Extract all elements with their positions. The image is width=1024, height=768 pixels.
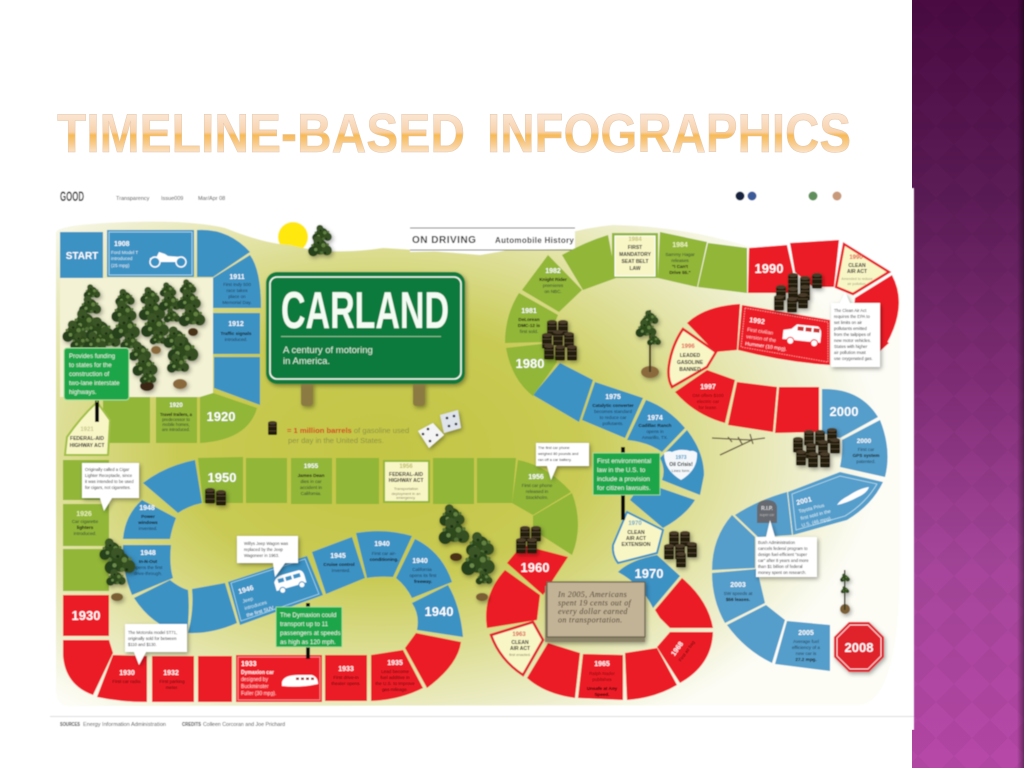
track 1940s curve: 1948 (140, 550, 156, 557)
track 1990s: CLEAN (848, 263, 866, 269)
track 1940s curve: introduces (244, 600, 268, 612)
track 1921-1950 left column: designed by (241, 677, 268, 683)
track 1960s loop: 1963 (512, 632, 526, 638)
branch (712, 434, 765, 455)
track 2000s: First car (858, 447, 875, 452)
track 2000s (712, 389, 888, 671)
track 1990s: 1997 (700, 384, 716, 391)
track 1970s: Oil Crisis! (669, 462, 693, 468)
track 1960s loop: 1968 (670, 641, 685, 658)
callout: highway funding: two-lane interstate (69, 380, 120, 387)
track 1921-1950 left column: First parking (159, 679, 185, 684)
track 1940s curve: In-N-Out (139, 559, 158, 564)
track 1908-1920: race takes (226, 288, 248, 293)
tombstone rip: super car (760, 513, 775, 517)
callout: bush administration: than $1 billion of federal (758, 564, 803, 569)
track 1950s row: emergency. (396, 496, 416, 500)
callout: motorola: The Motorola model 5T71, (128, 630, 177, 635)
track 1940s curve: invented. (139, 526, 157, 531)
track 1940s curve: Cruise control (323, 562, 355, 567)
track 1980s: 1982 (545, 268, 561, 275)
track 1970s: pollutants. (603, 421, 623, 426)
callout: car phone (536, 443, 589, 480)
track 1990s: electric car (697, 399, 720, 404)
track 2000s: 2003 (730, 582, 746, 589)
track 1940s curve: drive-through. (134, 571, 162, 576)
track 1960s loop: 1970 (635, 566, 663, 581)
callout: bush administration: money spent on research. (758, 570, 806, 575)
barrels stat: = 1 million barrels of gasoline used (287, 426, 409, 435)
track 1960s loop (486, 512, 713, 700)
track 1970s: 1974 (647, 415, 663, 422)
track 1990s: Amended to reduce (841, 277, 873, 281)
track 1970s: 1973 (675, 455, 687, 461)
track 1990s: for lease. (699, 405, 717, 410)
on driving heading: Automobile History (495, 236, 574, 245)
track 1990s: 1990 (755, 261, 783, 276)
track 1940s curve: opens its first (409, 573, 437, 578)
track 1990s: 1990 (849, 255, 863, 261)
infographic poster (50, 188, 914, 730)
sun (278, 222, 308, 252)
track 2000s: 2000 (830, 404, 858, 419)
track 1960s loop: EXTENSION (622, 542, 651, 548)
track 1970s: becomes standard (594, 409, 632, 414)
callout: willys jeep: Willys Jeep Wagon was (244, 541, 288, 546)
track 1990s: GM offers $100 (692, 393, 724, 398)
track 1921-1950 left column: Car cigarette (72, 519, 99, 524)
book: household spending (545, 582, 645, 642)
track 2000s: SW speeds at (724, 591, 753, 596)
track 1980s: 1984 (628, 237, 642, 243)
track 1950s row: deployment in an (392, 492, 420, 496)
callout: highway funding: construction of (69, 371, 110, 378)
callout: first environmental law (593, 447, 660, 520)
masthead: GOOD (60, 188, 84, 204)
track 1950s row: dies in car (301, 479, 322, 484)
footer credits: CREDITS (182, 722, 202, 728)
track 1980s: MANDATORY (619, 252, 652, 258)
track 1960s loop: publishes (592, 677, 612, 682)
track 1940s curve: 1940 (425, 604, 453, 619)
1921 federal-aid sign: 1921 (80, 427, 94, 433)
track 1980s: SEAT BELT (621, 259, 649, 265)
track 2000s: first sold in the (800, 509, 832, 522)
track 1980s: FIRST (628, 245, 642, 251)
callout: clean air act: requires the EPA to (834, 314, 870, 319)
track 1970s: Lines form. (672, 469, 690, 473)
track 1940s curve: conditioning. (370, 557, 398, 562)
track 1921-1950 left column: 1926 (76, 511, 92, 518)
callout: clean air act: The Clean Air Act (834, 308, 867, 313)
track 1980s: 1984 (672, 242, 688, 249)
forest trees (62, 279, 205, 391)
track 1921-1950 left column: fuel additive in (380, 675, 410, 680)
track 1970s: 1975 (605, 394, 621, 401)
track 1950s row: HIGHWAY ACT (389, 478, 423, 484)
footer credits: Colleen Corcoran and Joe Prichard (203, 722, 285, 728)
dice (418, 410, 461, 448)
callout: clean air act (831, 292, 880, 367)
footer credits (50, 716, 914, 728)
carland road sign: in America. (283, 356, 330, 367)
track 1908-1920: 1920 (169, 403, 183, 409)
callout: willys jeep: Wagoneer in 1963. (244, 553, 279, 558)
track 2000s: $56 leases. (726, 597, 750, 602)
track 1940s curve: opens the first (134, 565, 163, 570)
track 1980s: "I Can't (672, 264, 688, 269)
callout: first environmental law: law in the U.S. to (597, 467, 646, 474)
track 1980s: releases (671, 258, 689, 263)
track 1940s curve: 1940 (374, 541, 390, 548)
track 1950s row: Stockholm. (526, 495, 548, 500)
track 1921-1950 left column: lighters (77, 525, 94, 530)
callout: clean air act: set limits on air (834, 320, 863, 325)
callout: dymaxion: The Dymaxion could (280, 612, 337, 619)
callout: bush administration: cancels federal program to (758, 546, 808, 551)
track 2000s: U.S. (46 mpg). (801, 516, 833, 529)
callout: cigarette lighter (82, 463, 139, 511)
track 2000s: 2001 (796, 496, 813, 507)
track 1908-1920: First Indy 500 (223, 282, 251, 287)
track 2000s: 2005 (798, 630, 814, 637)
track 1921-1950 left column: 1930 (119, 670, 135, 677)
track 1990s: Hummer (10 mpg). (745, 341, 787, 353)
callout: dymaxion: passengers at speeds (280, 630, 341, 637)
masthead (60, 188, 842, 204)
callout: bush administration: car" after 8 years and more (758, 558, 809, 563)
track 1921-1950 left column: introduced. (74, 531, 96, 536)
track 1908-1920: are introduced. (162, 427, 190, 432)
track 1908-1920: introduced. (225, 337, 247, 342)
track 1960s loop: Speed. (594, 692, 610, 697)
track 1960s loop: Ralph Nader (589, 671, 615, 676)
track 1990s: version of the (746, 334, 776, 344)
track 2000s: new car is (796, 651, 817, 656)
track 1908-1920: 1912 (228, 321, 244, 328)
callout: clean air act: air pollution must (834, 350, 866, 355)
track 1960s loop: First air bag (678, 639, 696, 663)
track 1940s curve: 1945 (330, 553, 346, 560)
callout: car phone: weighed 80 pounds and (538, 452, 578, 456)
track 1940s curve: invented. (332, 568, 350, 573)
track 1921-1950 left column: 1935 (387, 660, 403, 667)
callout: highway funding: highways. (69, 389, 97, 396)
title: TIMELINE-BASED (57, 102, 465, 164)
track 1980s: 1980 (516, 356, 544, 371)
track 1950s row: 1956 (399, 464, 413, 470)
callout: bush administration (756, 520, 817, 577)
track 1908-1920: Ford Model T (111, 250, 138, 255)
board landscape (56, 222, 900, 706)
track 1921-1950 left column: Dymaxion car (241, 670, 274, 676)
callout: first environmental law: First environmental (597, 458, 651, 465)
track 2000s: GPS system (853, 453, 879, 458)
track 1940s curve: Power (141, 514, 155, 519)
track 1990s: AIR ACT (847, 269, 867, 275)
track 1921-1950 left column: theater opens. (331, 681, 361, 686)
forest clearing (60, 278, 213, 397)
track 1980s (505, 232, 747, 396)
track 1970s: opens in (646, 429, 664, 434)
track 1908-1920: Traffic signals (221, 331, 252, 336)
track 1940s curve: 1940 (412, 558, 428, 565)
tombstone rip (757, 500, 777, 523)
track 2000s: patented. (856, 459, 876, 464)
track 1908-1920 (60, 230, 261, 443)
callout: dymaxion (276, 603, 342, 659)
track 1990s: First civilian (747, 327, 774, 337)
stop sign 2008 (834, 622, 884, 672)
track 2000s: Toyota Prius (798, 503, 826, 515)
track 1980s: on NBC. (544, 289, 562, 294)
track 1950s row: California. (301, 491, 321, 496)
callout: cigarette lighter: for cigars, not cigarettes. (85, 485, 131, 490)
purple side panel (912, 0, 1024, 768)
track 1980s: DeLorean (518, 317, 540, 322)
track 2000s: efficiency of a (792, 645, 820, 650)
masthead: Transparency (116, 196, 150, 202)
callout: highway funding: to states for the (69, 362, 112, 369)
callout: clean air act: new motor vehicles. (834, 338, 871, 343)
track 1908-1920: Memorial Day. (222, 300, 252, 305)
callout: motorola: $110 and $130. (128, 642, 157, 647)
track 1921-1950 left column: Lead become (381, 669, 409, 674)
track 1921-1950 left column: 1932 (163, 670, 179, 677)
book: household spending: In 2005, Americans (557, 590, 627, 599)
callout: cigarette lighter: Lighter Receptacle, since (85, 473, 133, 478)
callout: willys jeep: replaced by the Jeep (244, 547, 284, 552)
track 1908-1920: predecessor to (162, 417, 191, 422)
callout: motorola: originally sold for between (128, 636, 177, 641)
callout: motorola (125, 624, 187, 665)
track 1950s row: accident in (300, 485, 322, 490)
tombstone rip: R.I.P. (761, 506, 774, 512)
title (57, 102, 851, 164)
track 1990s: BANNED (679, 367, 701, 373)
callout: highway funding: Provides funding (69, 353, 116, 360)
track 1940s curve (123, 460, 463, 637)
track 1908-1920: 1920 (207, 409, 235, 424)
track 1980s: LAW (629, 266, 641, 272)
track 1980s: premieres (543, 283, 564, 288)
track 1921-1950 left column: 1930 (72, 608, 100, 623)
track 1980s: DMC-12 is (518, 323, 541, 328)
book: household spending: on transportation. (558, 616, 623, 624)
track 1940s curve: 1948 (139, 505, 155, 512)
track 1908-1920: 1908 (114, 241, 130, 248)
barrel stacks (205, 273, 840, 568)
track 1990s: air pollution. (847, 282, 867, 286)
track 1950s row: 1955 (304, 463, 319, 470)
track 1950s row: James Dean (298, 473, 325, 478)
carland road sign: A century of motoring (283, 345, 373, 356)
callout: bush administration: Bush Administration (758, 540, 796, 545)
carland road sign: CARLAND (281, 282, 449, 340)
track 1960s loop: CLEAN (511, 640, 529, 646)
track 1950s row: released in (526, 489, 549, 494)
track 1960s loop: AIR ACT (626, 536, 646, 542)
track 1908-1920: Travel trailers, a (160, 412, 193, 417)
track 1921-1950 left column: 1933 (338, 666, 354, 673)
callout: first environmental law: include a provision (597, 476, 650, 483)
carland road sign (266, 272, 465, 406)
track 1908-1920: 1911 (229, 274, 245, 281)
callout: clean air act: use oxygenated gas. (834, 356, 873, 361)
track 1921-1950 left column: Fuller (30 mpg). (241, 691, 276, 697)
track 1921-1950 left column: gas mileage. (382, 687, 408, 692)
small trees (99, 225, 850, 614)
callout: clean air act: pollutants emitted (834, 326, 867, 331)
track 1950s row: 1956 (528, 474, 544, 481)
barrels stat (268, 421, 409, 445)
track 1980s: Sammy Hagar (665, 252, 695, 257)
callout: cigarette lighter: Originally called a Cigar (85, 467, 130, 472)
callout: highway funding (64, 348, 129, 423)
track 1908-1920: place on (228, 294, 246, 299)
track 1970s: to reduce car (600, 415, 627, 420)
track 1950s row: 1950 (208, 470, 236, 485)
track 1921-1950 left column: First car radio. (112, 679, 142, 684)
footer credits: Energy Information Administration (83, 722, 166, 728)
callout: cigarette lighter: it was intended to be used (85, 479, 134, 484)
track 1960s loop: first enacted. (509, 653, 531, 657)
track 1908-1920: introduced (111, 256, 133, 261)
track 1921-1950 left column: 1933 (241, 661, 257, 668)
barrels stat: per day in the United States. (288, 436, 384, 445)
callout: car phone: The first car phone (538, 446, 570, 450)
track 1921-1950 left column: First drive-in (333, 675, 359, 680)
1921 federal-aid sign (65, 402, 110, 455)
track 1940s curve: First car air- (372, 551, 397, 556)
book: household spending: spent 19 cents out of (558, 598, 633, 608)
callout: dymaxion: transport up to 11 (280, 621, 329, 628)
track 1980s: first sold. (520, 329, 538, 334)
track 1921-1950 left column: Buckminster (241, 684, 269, 690)
on driving heading: ON DRIVING (412, 235, 476, 246)
track 1970s: Amarillo, TX. (642, 435, 668, 440)
track 1960s loop: 1970 (628, 521, 642, 527)
track 1990s: 1996 (681, 344, 695, 350)
track 1950s row (198, 457, 578, 555)
track 1960s loop: 1965 (594, 661, 610, 668)
masthead: Mar/Apr 08 (198, 196, 225, 202)
track 1960s loop: AIR ACT (510, 646, 530, 652)
on driving heading (410, 228, 575, 252)
track 2000s: 2000 (857, 438, 872, 445)
track 1990s: GASOLINE (677, 360, 704, 366)
callout: dymaxion: as high as 120 mph. (280, 639, 336, 646)
callout: clean air act: from the tailpipes of (834, 332, 871, 337)
callout: bush administration: design fuel-efficient "super (758, 552, 808, 557)
track 1940s curve: California (412, 567, 432, 572)
track 1950s row: FEDERAL-AID (389, 472, 423, 478)
track 1960s loop: CLEAN (627, 530, 645, 536)
1921 federal-aid sign: FEDERAL-AID (70, 436, 104, 442)
track 2000s: Average fuel (793, 639, 819, 644)
track 1940s curve: 1946 (238, 585, 255, 596)
track 1921-1950 left column (63, 460, 461, 702)
stop sign 2008: 2008 (845, 640, 873, 655)
title: INFOGRAPHICS (487, 102, 851, 164)
track 1980s: 1981 (521, 308, 537, 315)
track 1960s loop: Unsafe at Any (587, 686, 618, 691)
footer credits: SOURCES (60, 722, 81, 728)
track 1960s loop: 1960 (521, 560, 549, 575)
track 1921-1950 left column: the U.S. to improve (375, 681, 415, 686)
1921 federal-aid sign: HIGHWAY ACT (70, 443, 104, 449)
track 1970s: Catalytic converter (592, 403, 634, 408)
callout: willys jeep (237, 536, 298, 577)
track 1908-1920: START (66, 251, 98, 262)
track 1990s: 1992 (749, 317, 765, 326)
track 1950s row: Transportation (394, 487, 418, 491)
track 1940s curve: Jeep (242, 596, 254, 605)
callout: clean air act: States with higher (834, 344, 868, 349)
track 1908-1920: mobile homes, (162, 422, 190, 427)
callout: first environmental law: for citizen lawsuits. (597, 485, 651, 492)
track 1980s: Drive 55." (669, 270, 691, 275)
track 1980s: Knight Rider (539, 277, 567, 282)
track 1940s curve: the first SUV. (246, 605, 275, 619)
track 1990s (668, 240, 899, 433)
track 1921-1950 left column: meter. (166, 685, 178, 690)
track 1970s (533, 363, 704, 528)
book: household spending: every dollar earned (558, 607, 628, 616)
masthead: Issue009 (161, 196, 183, 202)
track 1990s: LEADED (680, 353, 701, 359)
track 2000s: 27.2 mpg. (795, 657, 817, 662)
track 1940s curve: windows (137, 520, 158, 525)
track 1970s: Cadillac Ranch (639, 423, 672, 428)
track 1950s row: First car phone (522, 483, 553, 488)
track 1940s curve: freeway. (414, 579, 432, 584)
callout: car phone: ran off a car battery. (538, 458, 572, 462)
track 1908-1920: (25 mpg) (111, 263, 130, 268)
